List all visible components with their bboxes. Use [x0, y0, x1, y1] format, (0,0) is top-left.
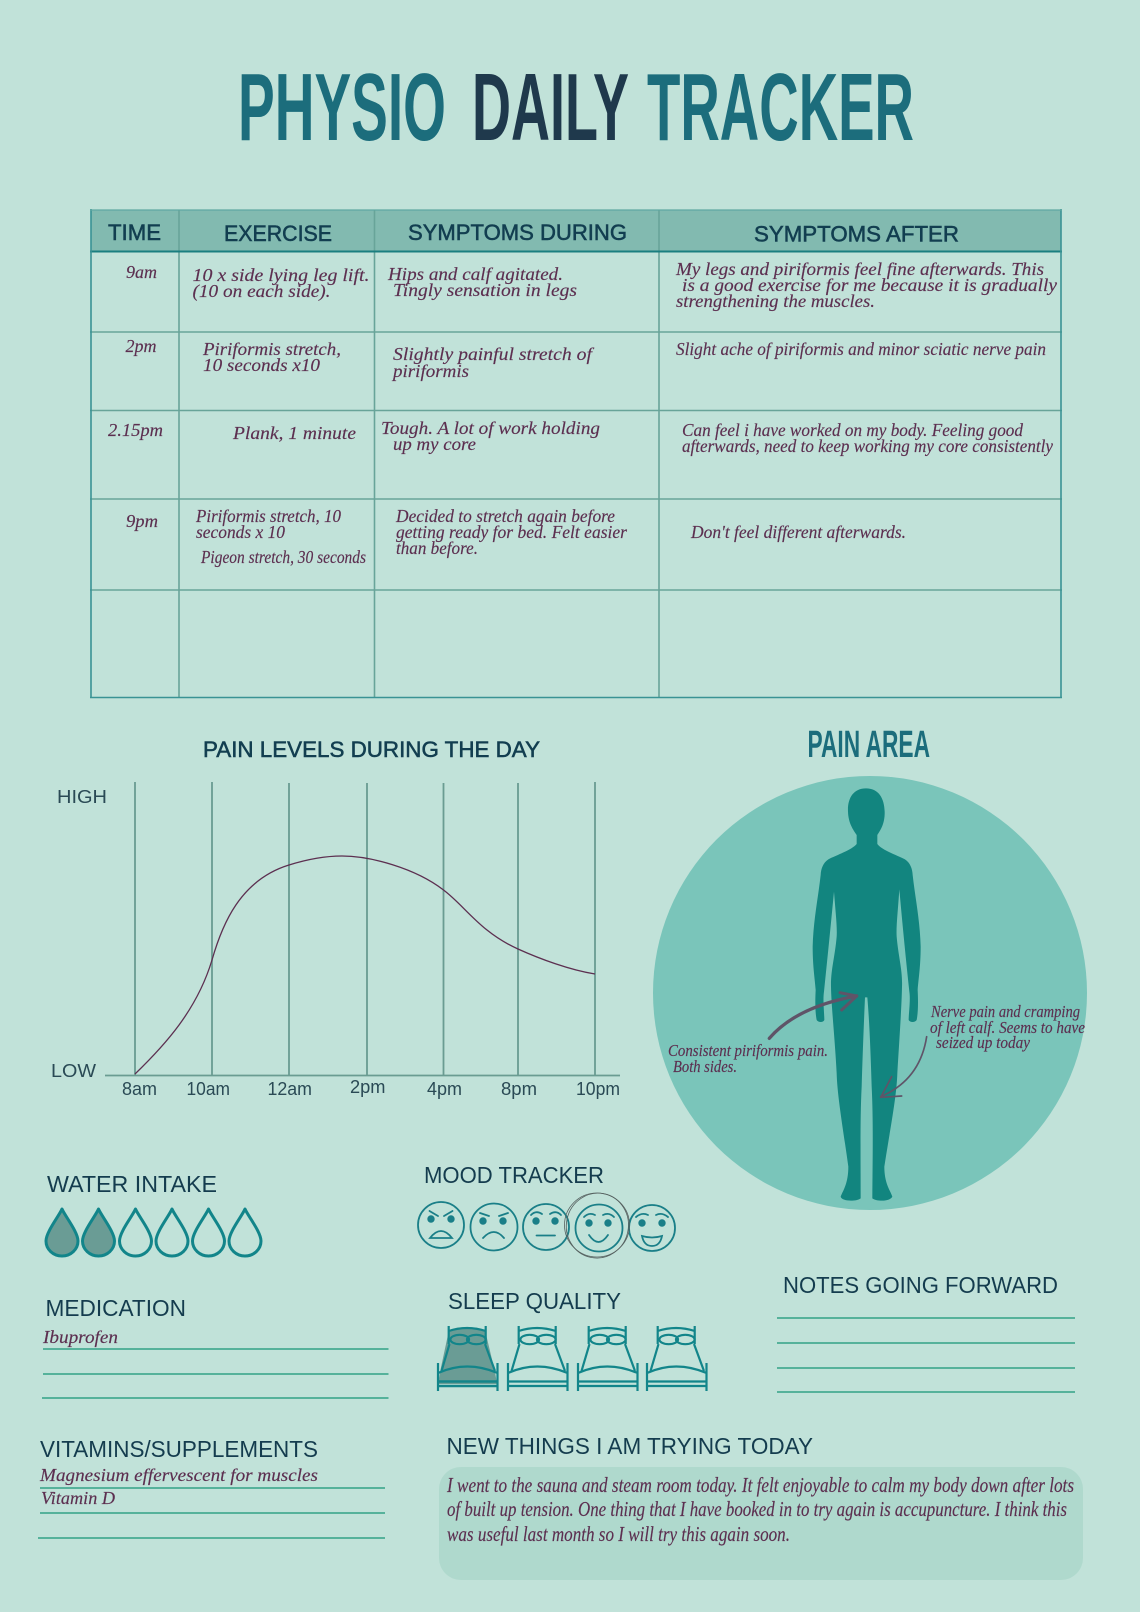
icon: neutral face [523, 1204, 569, 1250]
row: 9pm: 9pm [126, 511, 158, 531]
callout: piriformis pain: Both sides. [673, 1057, 737, 1076]
vitamins entries: Vitamin D [41, 1488, 115, 1508]
callout: calf pain: seized up today [936, 1033, 1031, 1052]
new things text [446, 1473, 1074, 1546]
axis labels: 4pm [427, 1079, 462, 1099]
title: PHYSIO [238, 54, 446, 161]
arrow: calf [881, 1037, 927, 1097]
panel: sleep quality [438, 1288, 706, 1391]
circle backdrop [653, 776, 1087, 1210]
title: DAILY [472, 54, 629, 161]
icon: angry face [418, 1202, 464, 1248]
table column headings: EXERCISE [224, 221, 332, 246]
row: 2.15pm [108, 418, 1053, 456]
axis labels: HIGH [57, 787, 107, 807]
row: 9am: (10 on each side). [192, 281, 330, 302]
table column headings [108, 220, 959, 246]
row: 2.15pm: up my core [393, 434, 476, 454]
panel: new things [439, 1433, 1083, 1580]
callout: calf pain [930, 1002, 1085, 1052]
panel: mood tracker [418, 1162, 675, 1264]
axis labels: 8am [122, 1079, 157, 1099]
row: 2pm: Piriformis stretch, [202, 339, 341, 359]
row: 9am [126, 259, 1057, 311]
sleep quality heading: SLEEP QUALITY [448, 1288, 621, 1314]
row: 9am: Tingly sensation in legs [393, 280, 577, 300]
axis labels: 2pm [350, 1077, 386, 1097]
medication lines [42, 1349, 388, 1398]
table column headings: TIME [108, 220, 161, 245]
water intake heading: WATER INTAKE [47, 1171, 217, 1197]
row: 9am: 9am [126, 262, 157, 282]
row: 2pm: Slightly painful stretch of [393, 344, 595, 364]
row: 9pm: Pigeon stretch, 30 seconds [200, 547, 366, 567]
row: 9pm: Don't feel different afterwards. [690, 522, 906, 542]
title [238, 54, 914, 161]
row: 9pm: seconds x 10 [196, 522, 285, 542]
vitamins entries [39, 1465, 318, 1508]
callout: calf pain: of left calf. Seems to have [930, 1018, 1085, 1037]
new things text box [439, 1467, 1083, 1580]
vitamins heading: VITAMINS/SUPPLEMENTS [40, 1436, 318, 1462]
vitamins entries: Magnesium effervescent for muscles [39, 1465, 318, 1485]
panel: medication [42, 1295, 389, 1398]
icon: empty bed [508, 1326, 568, 1391]
row: 9am: strengthening the muscles. [676, 291, 875, 311]
panel: pain levels chart [51, 737, 620, 1099]
callout: piriformis pain: Consistent piriformis pain. [668, 1041, 828, 1060]
axis labels: 10pm [576, 1079, 620, 1099]
row: 2pm: 10 seconds x10 [203, 355, 320, 375]
pain area heading: PAIN AREA [808, 724, 930, 766]
table header band [91, 210, 1061, 251]
row: 2pm: 2pm [126, 336, 156, 356]
callout: calf pain: Nerve pain and cramping [930, 1002, 1080, 1021]
row: 2.15pm: Plank, 1 minute [232, 423, 356, 443]
table column headings: SYMPTOMS AFTER [754, 222, 959, 246]
row: 2.15pm: afterwards, need to keep working my core consistently [682, 436, 1053, 456]
panel: pain area [653, 724, 1087, 1210]
callout: piriformis pain [668, 1041, 828, 1076]
row: 9am: 10 x side lying leg lift. [192, 265, 370, 285]
row: 9am: is a good exercise for me because it is gradually [682, 275, 1057, 295]
axis labels [51, 787, 620, 1099]
medication heading: MEDICATION [46, 1295, 186, 1321]
row: 2.15pm: Tough. A lot of work holding [381, 418, 600, 438]
row: 9pm [126, 506, 906, 567]
icon: happy face [576, 1204, 622, 1252]
pain curve [135, 856, 595, 1074]
table column headings: SYMPTOMS DURING [408, 220, 627, 245]
vitamins lines [38, 1488, 385, 1538]
notes lines [777, 1318, 1075, 1392]
icon: water drops [46, 1209, 261, 1256]
axis labels: 8pm [501, 1079, 537, 1099]
row: 2.15pm: 2.15pm [108, 420, 163, 440]
row: 9pm: than before. [396, 538, 478, 558]
panel: vitamins and supplements [38, 1436, 385, 1538]
medication entry: Ibuprofen [42, 1327, 118, 1347]
row: 9pm: Piriformis stretch, 10 [195, 506, 341, 526]
table grid [90, 209, 1062, 698]
new things heading: NEW THINGS I AM TRYING TODAY [446, 1433, 813, 1459]
row: 9pm: getting ready for bed. Felt easier [396, 522, 628, 542]
title: TRACKER [647, 54, 914, 161]
axis labels: 12am [268, 1079, 312, 1099]
hand-drawn selection ring [560, 1187, 634, 1264]
icon: empty bed [578, 1326, 638, 1391]
icon: empty bed [647, 1326, 706, 1391]
icon: very happy face [629, 1205, 675, 1251]
row: 2pm [126, 336, 1046, 381]
new things text: was useful last month so I will try this again soon. [447, 1522, 790, 1546]
chart grid lines [105, 782, 620, 1076]
row: 2pm: piriformis [391, 361, 469, 381]
notes heading: NOTES GOING FORWARD [783, 1272, 1058, 1298]
axis labels: LOW [51, 1061, 96, 1081]
panel: exercise table [90, 209, 1062, 698]
row: 9am: Hips and calf agitated. [387, 264, 563, 284]
icon: sad face [470, 1204, 518, 1250]
icon: filled bed [438, 1326, 498, 1391]
row: 2.15pm: Can feel i have worked on my body. Feeling good [682, 420, 1024, 440]
mood tracker heading: MOOD TRACKER [424, 1162, 604, 1188]
chart heading: PAIN LEVELS DURING THE DAY [203, 737, 540, 762]
arrow: piriformis [769, 993, 857, 1038]
body silhouette [813, 788, 921, 1201]
row: 9am: My legs and piriformis feel fine afterwards. This [675, 259, 1044, 279]
row: 2pm: Slight ache of piriformis and minor sciatic nerve pain [676, 339, 1046, 359]
panel: water intake [46, 1171, 261, 1256]
axis labels: 10am [186, 1079, 230, 1099]
row: 9pm: Decided to stretch again before [395, 506, 615, 526]
